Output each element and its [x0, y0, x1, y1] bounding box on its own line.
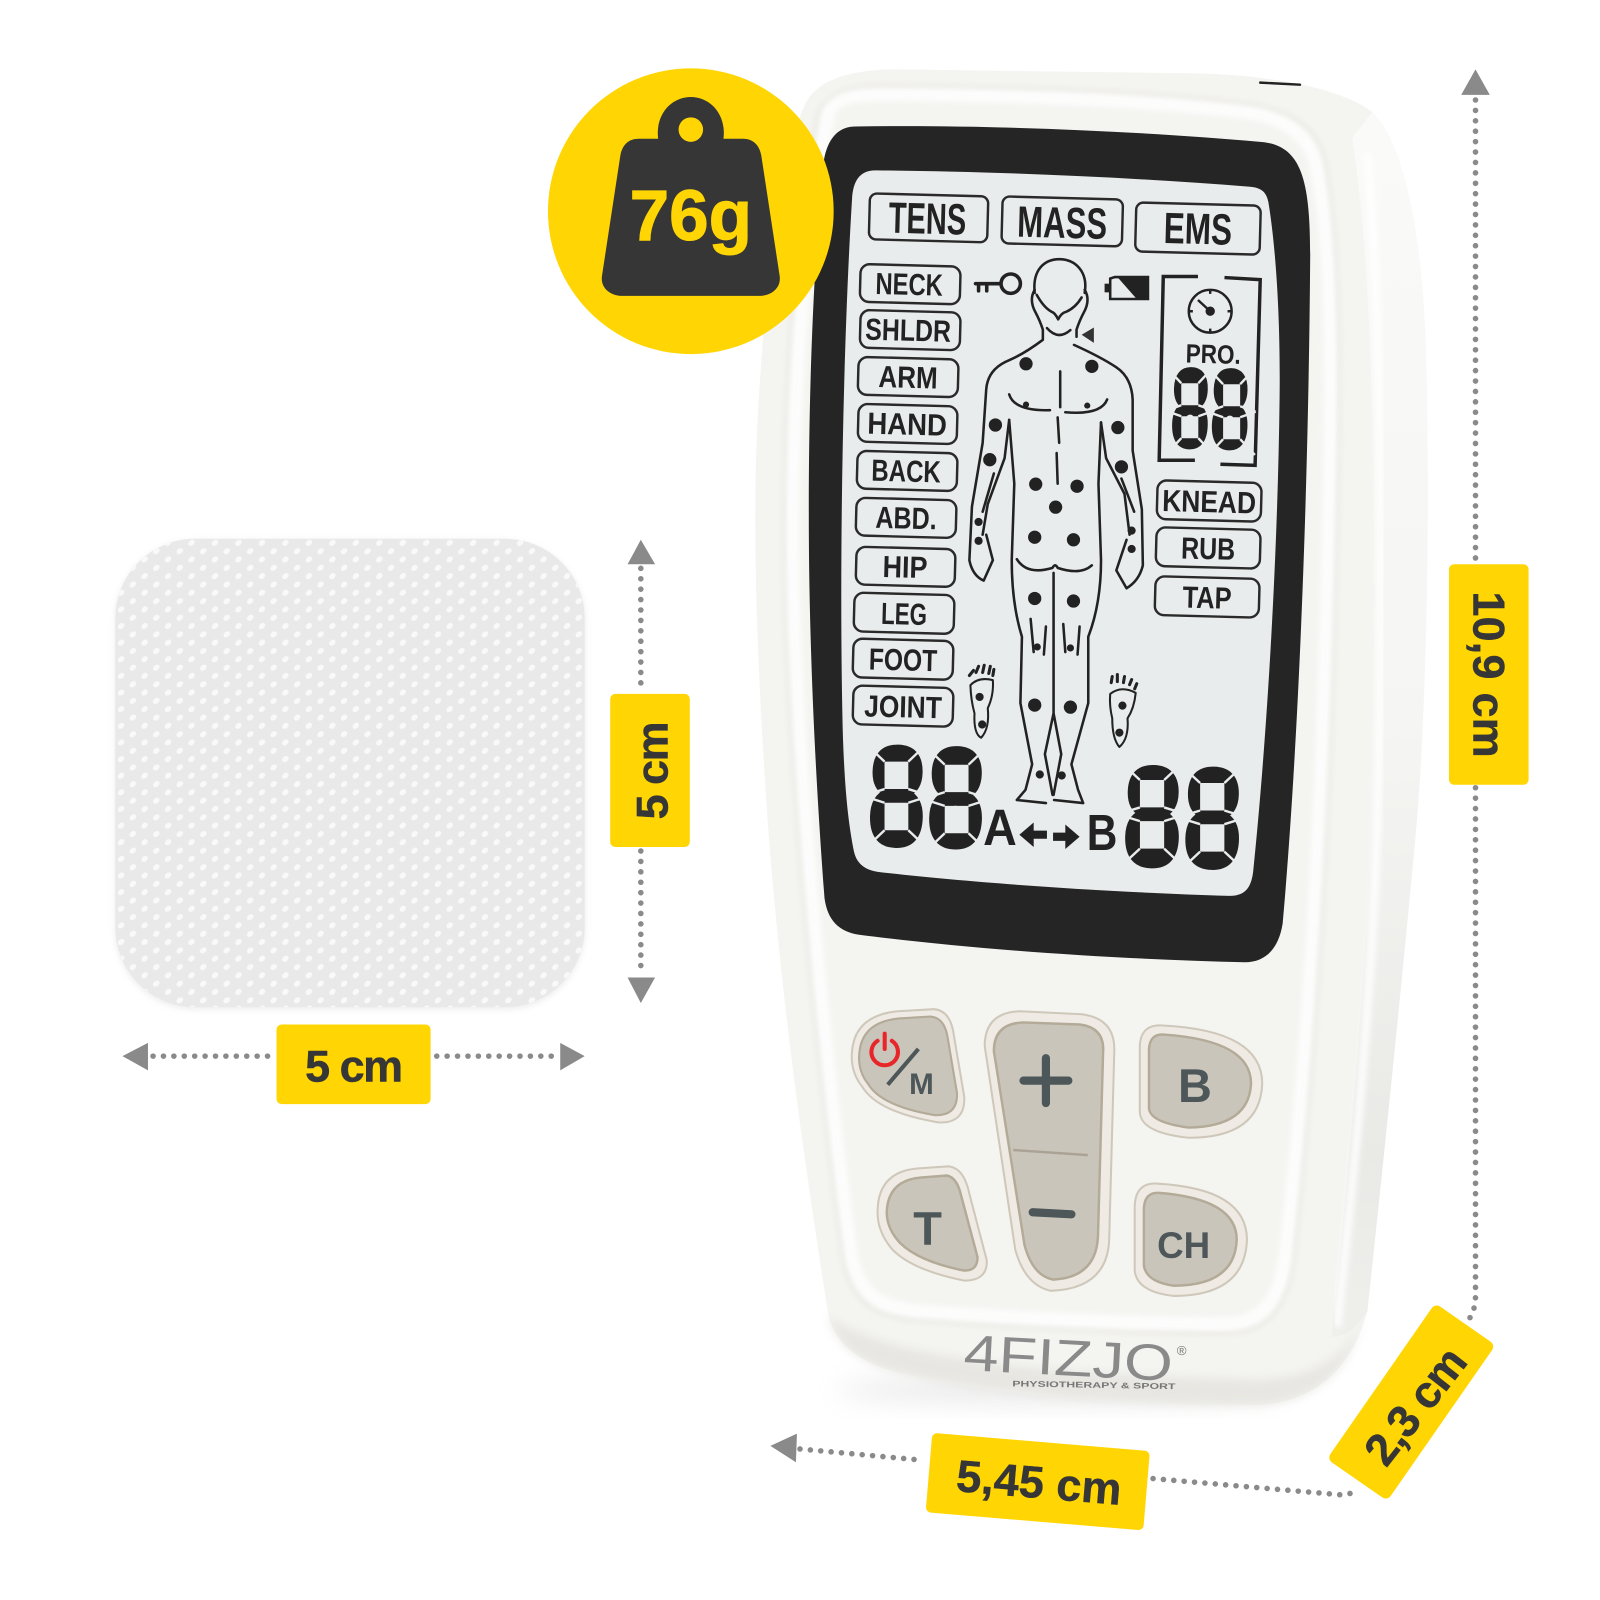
width dimension: 5,45 cm: 5,45 cm: [955, 1450, 1124, 1515]
icon: right foot: [1110, 674, 1137, 747]
mode buttons: TENS MASS EMS: [869, 193, 1261, 255]
channel indicator A to B: B: [1087, 804, 1117, 861]
massage mode labels: KNEAD: [1162, 484, 1257, 520]
icon: battery: [1105, 277, 1148, 299]
timer and program bracket: PRO.: [1185, 339, 1241, 370]
depth dimension: 2,3 cm: 2,3 cm: [1354, 1337, 1477, 1475]
massage mode labels: [1155, 480, 1262, 618]
channel indicator A to B: A: [983, 799, 1017, 856]
button: T: [878, 1166, 987, 1281]
body area labels: HIP: [882, 550, 928, 585]
mode buttons: TENS MASS EMS: TENS: [888, 194, 967, 245]
channel indicator A to B: [983, 799, 1117, 861]
brand logo: 4FIZJO: [962, 1324, 1174, 1392]
body area labels: FOOT: [868, 643, 938, 678]
mode buttons: TENS MASS EMS: EMS: [1163, 204, 1233, 255]
button: B: B: [1178, 1060, 1212, 1112]
vertical dimension: 5 cm: [610, 540, 690, 1003]
horizontal dimension: 5 cm: [122, 1024, 585, 1104]
height dimension: 10,9 cm: [1449, 69, 1529, 1321]
right channel digits: [1118, 745, 1246, 897]
weight badge: 76g: [630, 176, 752, 256]
icon: left foot: [969, 665, 994, 738]
button: plus / minus: [985, 1011, 1114, 1291]
timer and program bracket: [1159, 277, 1260, 472]
left channel digits: 88: [865, 724, 988, 876]
body area labels: HAND: [867, 407, 947, 443]
brand logo: ®: [1177, 1343, 1187, 1358]
body area labels: JOINT: [864, 689, 942, 725]
body area labels: LEG: [881, 597, 927, 632]
vertical dimension: 5 cm: 5 cm: [626, 721, 677, 819]
body area labels: NECK: [875, 267, 943, 303]
body area labels: SHLDR: [865, 313, 951, 349]
right channel digits: 88: [1120, 745, 1245, 897]
massage mode labels: TAP: [1182, 581, 1232, 616]
depth dimension: 2,3 cm: [1327, 1303, 1496, 1501]
body area labels: ABD.: [875, 501, 937, 536]
horizontal dimension: 5 cm: 5 cm: [305, 1041, 403, 1092]
icon: power symbol: [871, 1034, 898, 1065]
button: power / M: M: [909, 1068, 934, 1101]
button: B: [1140, 1025, 1262, 1138]
brand logo: PHYSIOTHERAPY & SPORT: [1012, 1379, 1176, 1391]
button: CH: [1135, 1184, 1247, 1296]
device body: [755, 69, 1428, 1405]
height dimension: 10,9 cm: 10,9 cm: [1463, 591, 1514, 758]
button: power / M: [852, 1009, 964, 1122]
body figure with electrode points: [969, 259, 1143, 803]
mode buttons: TENS MASS EMS: MASS: [1017, 198, 1108, 249]
LCD screen: [841, 170, 1280, 897]
LCD bezel: [809, 126, 1310, 962]
icon: weight: [602, 97, 780, 296]
panel: electrode gel pad: [115, 539, 585, 1009]
icon: key: [976, 274, 1020, 293]
body area labels: ARM: [878, 360, 938, 396]
body area labels: BACK: [871, 454, 941, 490]
width dimension: 5,45 cm: [770, 1433, 1357, 1530]
icon: small pointer triangle: [1082, 328, 1094, 343]
timer and program bracket: 88: [1169, 351, 1252, 472]
massage mode labels: RUB: [1181, 531, 1236, 567]
icon: clock: [1189, 290, 1232, 333]
button: T: T: [913, 1203, 942, 1255]
weight badge: [548, 68, 834, 354]
button: CH: CH: [1157, 1225, 1210, 1266]
left channel digits: [863, 724, 990, 876]
body area labels: [853, 264, 961, 727]
